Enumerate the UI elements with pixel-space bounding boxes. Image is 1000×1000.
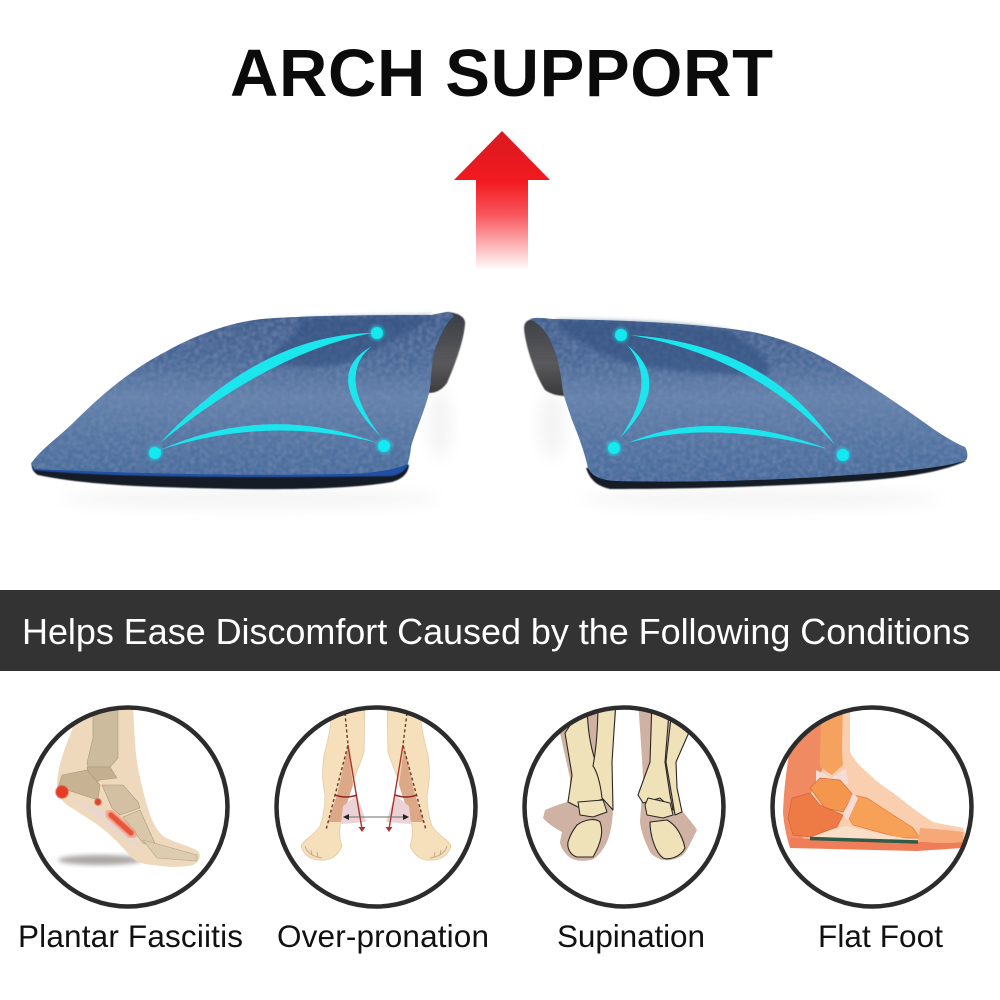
left fibula [593, 700, 616, 810]
cyan dot halo [836, 448, 850, 462]
double arrow [349, 816, 403, 818]
left triangle [341, 795, 366, 824]
circle outline [28, 708, 228, 906]
cyan dot halo [148, 446, 162, 460]
right heel bone [650, 820, 685, 859]
cyan dot [371, 327, 383, 339]
cyan dot [615, 329, 627, 341]
label: Supination [557, 918, 705, 954]
pain glow [110, 814, 132, 834]
felt top [31, 312, 454, 475]
arch gap [812, 826, 915, 840]
banner [0, 590, 1000, 671]
left toes [305, 846, 322, 858]
toes [918, 828, 963, 843]
ankle joint [816, 768, 848, 786]
cyan arch curve: bottom [160, 424, 378, 450]
cyan arch curve: side [620, 345, 649, 438]
right foot skin [638, 700, 697, 860]
right talus [645, 798, 673, 818]
circle outline [276, 708, 476, 906]
heel bone [58, 770, 100, 800]
midfoot bones [847, 795, 920, 838]
heel bone [788, 793, 843, 837]
label: Plantar Fasciitis [18, 918, 243, 954]
shin bone [820, 700, 843, 775]
panel: flat foot [772, 700, 972, 954]
heel cup fold shadow [555, 320, 770, 375]
right toes [430, 846, 447, 858]
cyan dot [837, 449, 849, 461]
right leg [387, 700, 451, 860]
right red line [389, 745, 403, 829]
right dashed axis [403, 713, 426, 830]
insole: left [31, 312, 465, 508]
ground shadow [580, 490, 940, 508]
cyan dot halo [606, 440, 622, 456]
right tibia [638, 700, 673, 810]
cyan arch curve: bottom [628, 426, 828, 449]
cyan dot halo [376, 438, 392, 454]
sole edge [586, 440, 966, 489]
left angle arc [335, 795, 357, 797]
label: Flat Foot [818, 918, 943, 954]
right shin shade [399, 746, 424, 822]
left heel bone [568, 820, 602, 857]
illustration: flat foot side view [783, 700, 966, 851]
blue edge trim [33, 460, 408, 477]
sole skin [790, 838, 965, 851]
left tibia [564, 716, 602, 808]
left leg [301, 700, 365, 860]
heel cup back [524, 319, 566, 396]
sole edge [32, 450, 409, 489]
heel cup fold shadow [262, 315, 433, 367]
insole: right [524, 318, 967, 508]
cyan dot [149, 447, 161, 459]
cyan dot halo [370, 326, 384, 340]
pain spot: mid [94, 798, 102, 806]
arrowhead right [403, 814, 409, 820]
under-heel shadow [428, 391, 452, 459]
felt top [530, 318, 967, 482]
heel skin [783, 700, 822, 848]
toe bones [143, 840, 197, 861]
banner text: Helps Ease Discomfort Caused by the Following Conditions [22, 611, 970, 652]
illustration: foot with heel pain [56, 700, 200, 867]
left red line [348, 745, 362, 829]
left dashed axis [326, 713, 348, 830]
right triangle [386, 795, 411, 824]
plantar band [810, 838, 918, 842]
cyan dot [608, 442, 620, 454]
label: Over-pronation [277, 918, 489, 954]
floor shadow [58, 855, 142, 865]
panel: over-pronation [276, 700, 489, 954]
left shin shade [328, 746, 353, 822]
talus bone [86, 766, 118, 782]
cyan arch curve: top [160, 333, 372, 443]
panel: plantar fasciitis [18, 700, 243, 954]
left talus [578, 800, 607, 817]
banner background [0, 590, 1000, 671]
left foot skin [543, 700, 617, 861]
cyan dot halo [614, 328, 628, 342]
shin bone [86, 710, 118, 767]
navicular joint [843, 793, 858, 820]
right red tip [386, 827, 392, 832]
cyan dot [378, 440, 390, 452]
arrow: upward red [454, 131, 550, 270]
right fibula [666, 700, 690, 815]
left red tip [358, 827, 366, 832]
circle outline [524, 708, 724, 906]
pain streak [111, 815, 131, 833]
circle outline [772, 708, 972, 906]
talus bone [810, 778, 853, 812]
cyan arch curve: top [630, 335, 835, 445]
pain spot: heel [56, 786, 68, 798]
foot skin [57, 700, 200, 867]
illustration: legs with inward angle [301, 700, 451, 860]
ground shadow [60, 490, 440, 508]
heel cup back [428, 312, 465, 393]
illustration: rear view of ankles [543, 700, 697, 861]
panel: supination [524, 700, 724, 954]
cyan arch curve: side [348, 346, 381, 437]
foot outline [783, 700, 966, 850]
under-heel shadow [538, 391, 566, 459]
midfoot bones [102, 785, 140, 815]
title: ARCH SUPPORT [230, 36, 773, 111]
arrowhead left [343, 814, 349, 820]
metatarsal bones [122, 810, 155, 844]
right angle arc [395, 795, 417, 797]
fascia band [70, 797, 142, 850]
